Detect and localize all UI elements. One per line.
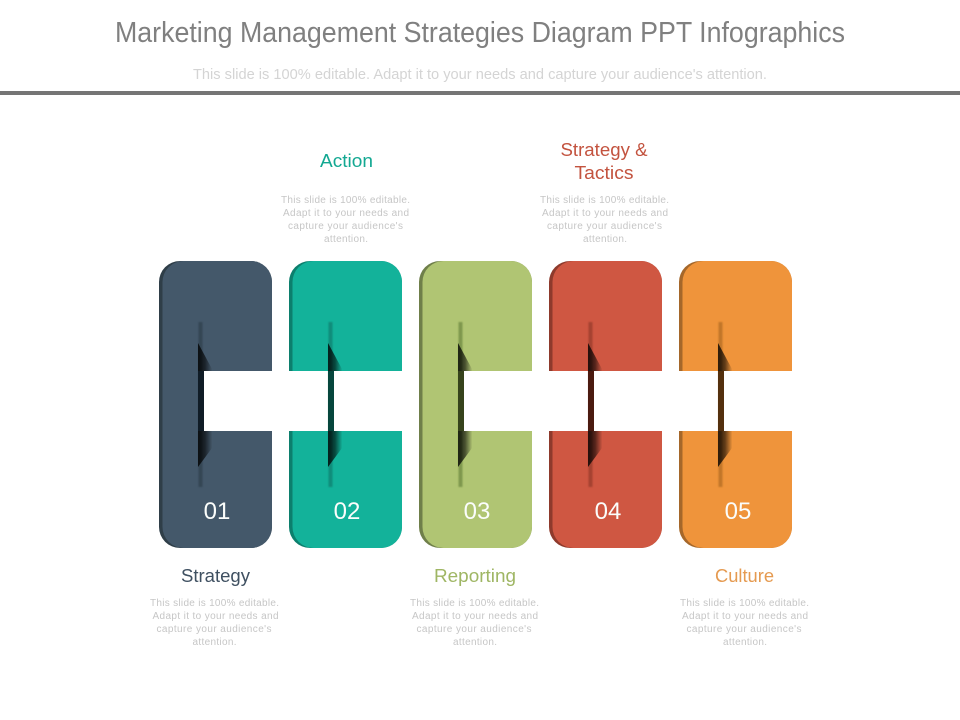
heading: Strategy: Strategy [181, 566, 250, 586]
text block: Strategy & Tactics: capture your audience's [547, 221, 662, 232]
panel: card 04 [547, 261, 664, 548]
text block: Action [281, 195, 410, 245]
text block: Strategy: This slide is 100% editable. [150, 598, 279, 609]
panel: card 03 [419, 261, 534, 548]
title: Marketing Management Strategies Diagram PPT Infographics [115, 17, 845, 49]
heading: Action: Action [320, 151, 373, 171]
text block: Action: capture your audience's [288, 221, 403, 232]
text block: Strategy & Tactics: This slide is 100% editable. [540, 195, 669, 206]
number 02: 02 [334, 498, 360, 525]
heading: Strategy & Tactics [560, 140, 648, 183]
text block: Culture: attention. [723, 637, 767, 648]
panel: card 02 [287, 261, 404, 548]
text block: Reporting [410, 598, 539, 648]
text block: Reporting: capture your audience's [416, 624, 532, 635]
heading: Strategy & Tactics: Tactics [574, 163, 634, 183]
heading: Strategy & Tactics: Strategy & [560, 140, 648, 160]
text block: Culture: Adapt it to your needs and [682, 611, 808, 622]
text block: Action: Adapt it to your needs and [283, 208, 409, 219]
text block: Culture [680, 598, 809, 648]
text block: Strategy & Tactics: attention. [583, 234, 627, 245]
text block: Reporting: attention. [453, 637, 497, 648]
text block: Strategy & Tactics: Adapt it to your needs and [542, 208, 668, 219]
heading: Reporting: Reporting [434, 566, 516, 586]
number 05: 05 [725, 498, 751, 525]
text block: Strategy: capture your audience's [156, 624, 272, 635]
text block: Strategy: Adapt it to your needs and [152, 611, 278, 622]
panel: card 01 [159, 261, 274, 548]
panel: card 05 [677, 261, 794, 548]
number 04: 04 [595, 498, 621, 525]
text block: Reporting: Adapt it to your needs and [412, 611, 538, 622]
heading: Culture: Culture [715, 566, 774, 586]
text block: Culture: capture your audience's [686, 624, 802, 635]
text block: Strategy [150, 598, 279, 648]
text block: Strategy & Tactics [540, 195, 669, 245]
text block: Reporting: This slide is 100% editable. [410, 598, 539, 609]
header rule [0, 91, 960, 95]
number 03: 03 [464, 498, 490, 525]
text block: Strategy: attention. [192, 637, 236, 648]
subtitle: This slide is 100% editable. Adapt it to your needs and capture your audience's attention. [193, 66, 767, 83]
text block: Culture: This slide is 100% editable. [680, 598, 809, 609]
number 01: 01 [204, 498, 230, 525]
text block: Action: attention. [324, 234, 368, 245]
text block: Action: This slide is 100% editable. [281, 195, 410, 206]
